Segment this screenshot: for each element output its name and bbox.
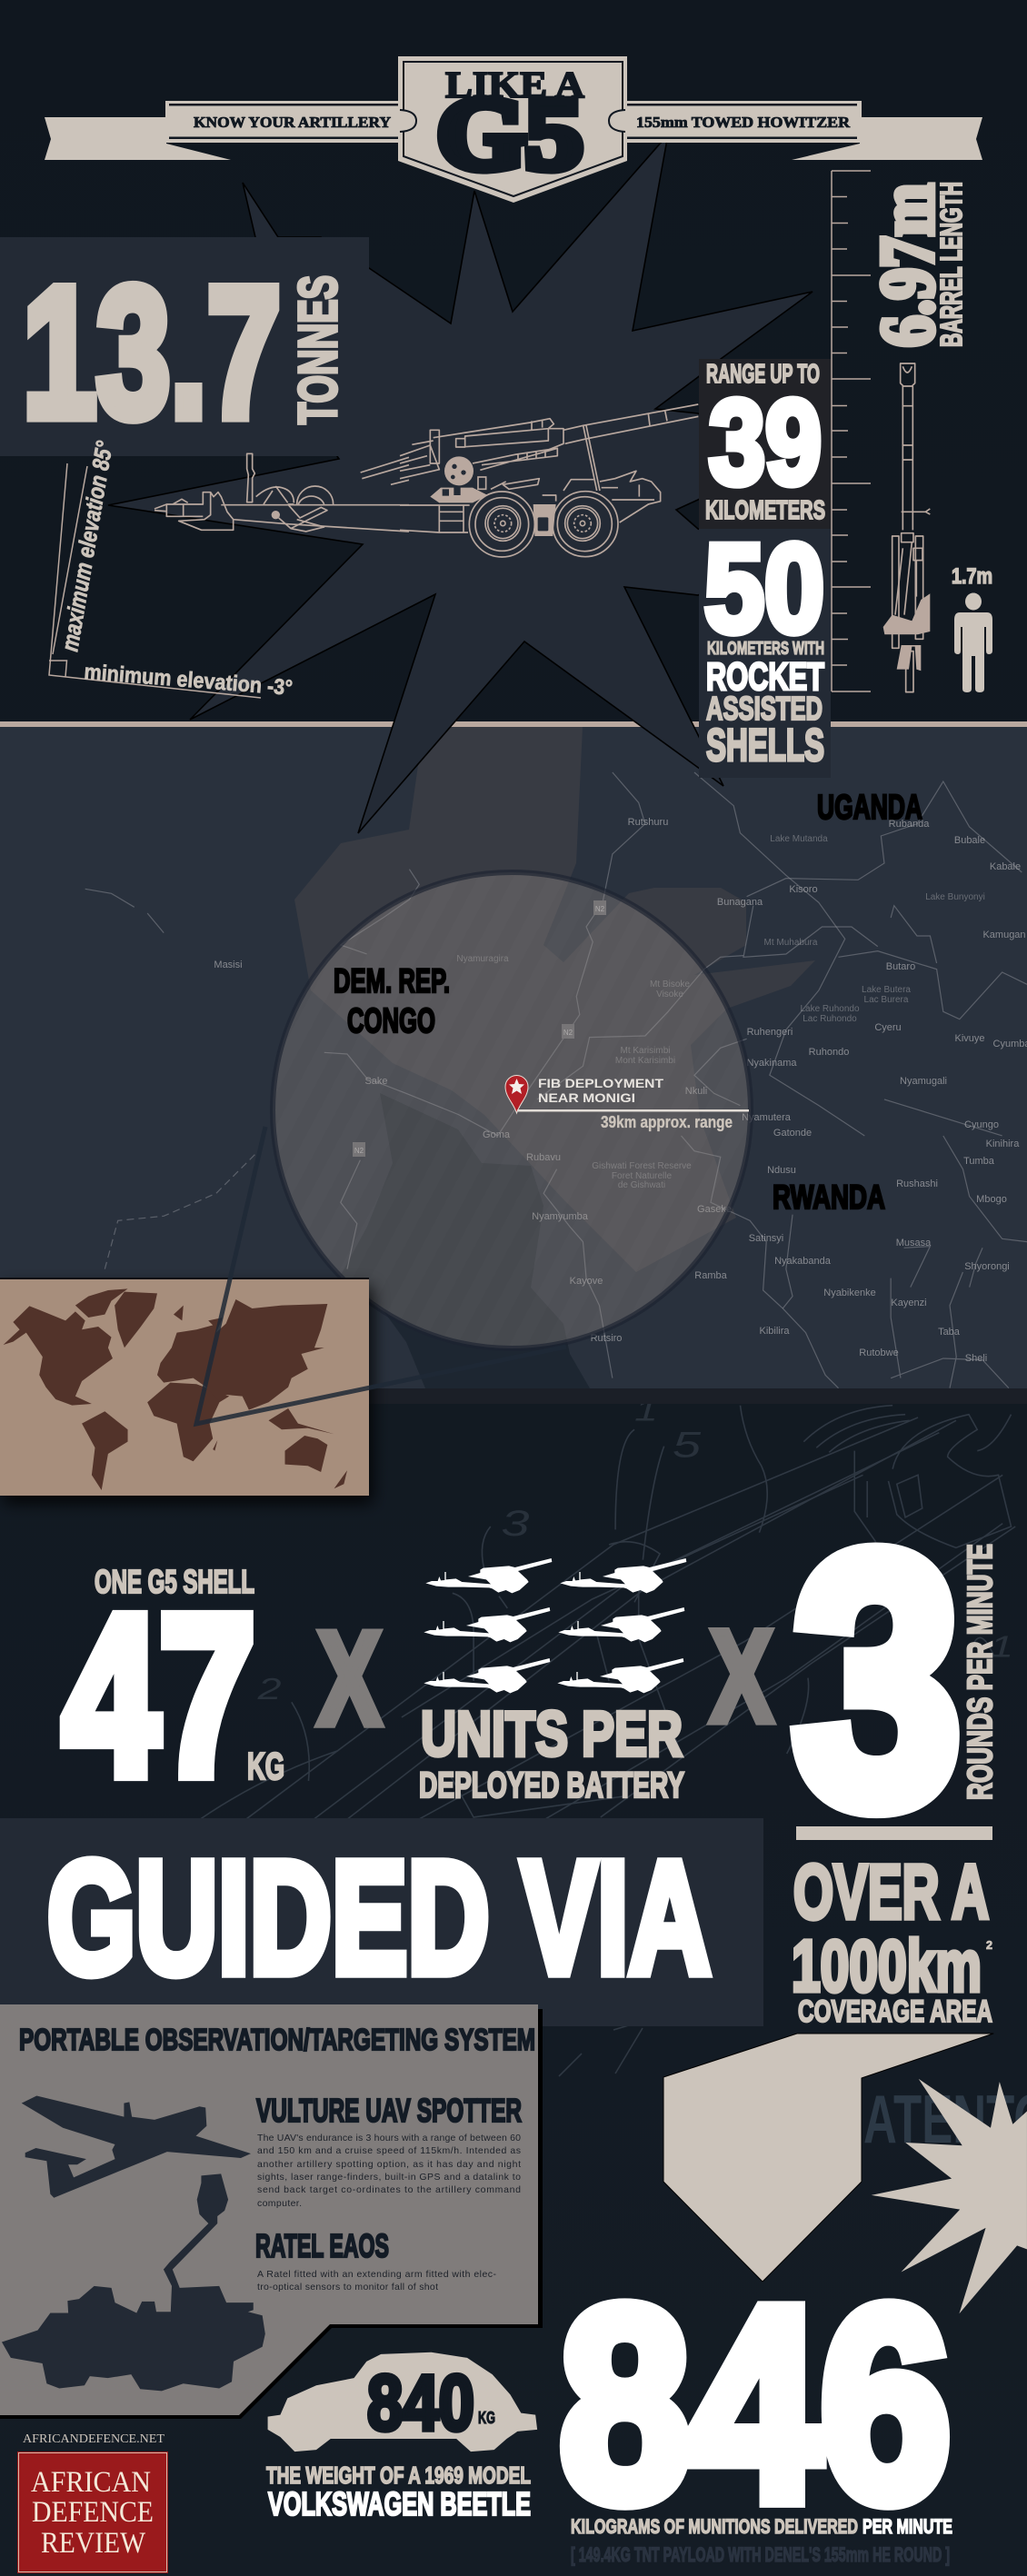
text: Vulture UAV: and 150 km and a cruise speed of 115km/h. Intended as <box>257 2145 521 2156</box>
gun: rear trail <box>155 453 409 532</box>
patent drawing background: 1 <box>634 1393 658 1427</box>
map: place names: Kisoro <box>789 884 818 895</box>
map: place names: Mbogo <box>976 1194 1007 1205</box>
map: place names: Bubale <box>954 835 985 846</box>
text: Ratel EAOS: RATEL EAOS <box>255 2227 389 2264</box>
panel: guided via: GUIDED VIA <box>47 1829 711 2007</box>
callout: FIB deployment: NEAR MONIGI <box>538 1090 635 1105</box>
map: roads upper <box>85 772 1027 1136</box>
country labels <box>334 789 922 1216</box>
map: place names: Mt Bisoke <box>650 980 690 990</box>
panel: deployment map <box>0 727 1027 1388</box>
panel: range: ASSISTED <box>706 690 823 727</box>
elevation diagram: maximum elevation 85° <box>55 439 118 653</box>
map: place names: Kinihira <box>986 1139 1020 1149</box>
source logo: DEFENCE <box>32 2496 154 2529</box>
band under map <box>0 1388 1027 1404</box>
elevation diagram <box>49 439 294 701</box>
map: place names: Butaro <box>886 961 915 972</box>
map: place names: Mont Karisimbi <box>615 1056 675 1066</box>
text: Vulture UAV <box>256 2092 522 2209</box>
map: place names: Kabale <box>990 861 1021 872</box>
map: place names: Rushashi <box>896 1179 938 1189</box>
map: place names: Rubanda <box>889 819 930 830</box>
map: place names: Kibilira <box>759 1326 790 1337</box>
map: place names: Masisi <box>214 960 243 970</box>
icon: map pin <box>505 1076 528 1113</box>
stat: shell weight: KG <box>247 1745 284 1787</box>
shell burst <box>872 2079 1027 2313</box>
panel: guided via <box>0 1818 763 2026</box>
callout: FIB deployment <box>505 1076 749 1131</box>
map: place names: Foret Naturelle <box>612 1171 673 1181</box>
map: volcano park area <box>294 727 815 1272</box>
map: place names: Nyakabanda <box>774 1256 832 1267</box>
G5 howitzer line drawing <box>155 404 698 557</box>
person scale figure <box>952 564 992 692</box>
panel: range <box>699 359 831 778</box>
map: place names: Shyorongi <box>964 1261 1010 1272</box>
map: place names: Lac Burera <box>864 995 909 1005</box>
starburst behind gun <box>108 134 813 833</box>
map: place names: Tumba <box>963 1156 995 1167</box>
stat: VW beetle: 840 <box>367 2360 474 2447</box>
panel: range: SHELLS <box>706 720 824 771</box>
map: roads lower <box>105 1136 1027 1388</box>
ribbon text left: KNOW YOUR ARTILLERY <box>194 114 391 131</box>
map: place names <box>214 817 1027 1364</box>
panel: weight: TONNES <box>288 275 348 424</box>
map: place names: Visoke <box>656 990 683 1000</box>
map: place names: Lake Butera <box>862 985 911 995</box>
stat: VW beetle <box>266 2352 537 2522</box>
stat: shell weight: ONE G5 SHELL <box>95 1563 254 1600</box>
stat: VW beetle: VOLKSWAGEN BEETLE <box>268 2485 531 2522</box>
stat: rounds per minute: ROUNDS PER MINUTE <box>962 1544 1000 1800</box>
map: place names: Ruhengeri <box>747 1027 793 1038</box>
callout: FIB deployment: 39km approx. range <box>601 1113 733 1131</box>
stat: VW beetle: THE WEIGHT OF A 1969 MODEL <box>266 2462 531 2489</box>
text: Vulture UAV: computer. <box>257 2198 302 2209</box>
source logo <box>17 2432 168 2573</box>
panel: range: 50 <box>704 519 824 659</box>
map: place names: Sheli <box>965 1353 987 1364</box>
map: place names: de Gishwati <box>618 1180 665 1190</box>
label: Rwanda: RWANDA <box>773 1179 885 1216</box>
stat: units per battery: DEPLOYED BATTERY <box>419 1765 684 1805</box>
stat: coverage area: 2 <box>986 1938 992 1952</box>
stat: VW beetle: KG <box>478 2409 495 2427</box>
map: place names: Nyamyumba <box>532 1211 589 1222</box>
ribbon centre <box>165 101 862 143</box>
map: N2 road shields: N2 <box>563 1029 573 1037</box>
map: place names: Musasa <box>896 1238 932 1248</box>
title shield <box>398 56 627 203</box>
inset: world map <box>0 1278 369 1496</box>
map: place names: Lake Bunyonyi <box>925 892 985 902</box>
map: place names: Ruhondo <box>809 1047 849 1058</box>
map: place names: Rutobwe <box>859 1348 899 1358</box>
map: place names: Kivuye <box>954 1033 985 1044</box>
stat: rounds per minute: 3 <box>793 1481 961 1879</box>
multiply sign 2: X <box>711 1605 773 1749</box>
stat: coverage area <box>792 1826 992 2029</box>
barrel length text: 6.97m <box>865 184 950 347</box>
map: place names: Nkuli <box>685 1086 707 1097</box>
map: place names: Lake Ruhondo <box>800 1004 860 1014</box>
ribbon text right: 155mm TOWED HOWITZER <box>636 114 851 131</box>
shell shape <box>663 2034 993 2282</box>
map: place names: Nyamugali <box>900 1076 947 1087</box>
map: place names: Nyamuragira <box>456 954 509 964</box>
ribbon tails <box>45 117 231 160</box>
label: DRC <box>334 962 450 1040</box>
icon group: six guns <box>424 1558 686 1693</box>
gun: carriage and barrel <box>400 404 698 557</box>
panel: range: 39 <box>709 375 822 509</box>
map: place names: Taba <box>938 1327 961 1338</box>
map: place names: Ramba <box>694 1270 728 1281</box>
zoom lines from inset to circle <box>196 1127 566 1424</box>
map: place names: Gishwati Forest Reserve <box>592 1161 692 1171</box>
map: place names: Rubavu <box>526 1152 561 1163</box>
header banner <box>45 56 982 203</box>
elevation diagram: minimum elevation -3° <box>84 660 294 701</box>
stat: units per battery: UNITS PER <box>421 1698 683 1769</box>
stat: munitions per minute: KILOGRAMS OF MUNITIONS DELIVERED <box>571 2515 858 2538</box>
map: N2 road shields <box>353 900 606 1157</box>
stat: units per battery <box>419 1698 684 1805</box>
map: place names: Gatonde <box>773 1128 812 1139</box>
barrel length text: BARREL LENGTH <box>934 182 968 347</box>
map: place names: Sake <box>364 1076 388 1087</box>
panel: weight: 13.7 <box>23 249 281 456</box>
text: Ratel EAOS <box>255 2227 496 2293</box>
map: N2 road shields: N2 <box>354 1147 364 1155</box>
panel: range: KILOMETERS WITH <box>707 639 824 659</box>
map: place names: Bunagana <box>717 897 763 908</box>
map: place names: Rutsiro <box>591 1333 622 1344</box>
map: place names: Lac Ruhondo <box>803 1014 857 1024</box>
panel: range: ROCKET <box>706 655 824 699</box>
text: Ratel EAOS: tro-optical sensors to monitor fall of shot <box>257 2282 438 2293</box>
source logo: AFRICANDEFENCE.NET <box>23 2432 165 2446</box>
map: N2 road shields: N2 <box>595 905 605 913</box>
stat: munitions per minute: PER MINUTE <box>862 2515 952 2538</box>
panel: range: KILOMETERS <box>705 496 825 525</box>
multiply sign 1: X <box>318 1605 381 1752</box>
map: place names: Cyungo <box>964 1119 999 1130</box>
source logo: AFRICAN <box>31 2466 151 2499</box>
label: DRC: CONGO <box>347 1002 435 1040</box>
icon: beetle silhouette <box>268 2352 537 2452</box>
person scale figure: 1.7m <box>952 564 992 589</box>
panel: range: RANGE UP TO <box>706 360 820 389</box>
label: DRC: DEM. REP. <box>334 962 450 1000</box>
text: Ratel EAOS: A Ratel fitted with an extending arm fitted with elec- <box>257 2269 496 2280</box>
map: Lake Kivu <box>341 1093 590 1388</box>
map: place names: Nyabikenke <box>823 1288 876 1298</box>
map: place names: Nyakinama <box>746 1058 797 1069</box>
source logo: REVIEW <box>41 2527 146 2560</box>
gun rear view <box>883 363 930 692</box>
panel heading: PORTABLE OBSERVATION/TARGETING SYSTEM <box>19 2023 535 2056</box>
icon: UAV silhouette <box>22 2096 251 2198</box>
patent drawing background: 3 <box>501 1504 529 1544</box>
map: place names: Goma <box>483 1129 511 1140</box>
stat: shell weight: 47 <box>63 1568 255 1822</box>
patent drawing background: 1 <box>990 1629 1013 1664</box>
icon: Ratel silhouette <box>2 2173 265 2391</box>
map: place names: Cyeru <box>874 1022 902 1033</box>
beige divider <box>0 721 1027 727</box>
map: place names: Lake Mutanda <box>770 834 828 844</box>
map: place names: Gaseke <box>697 1204 732 1215</box>
map: place names: Kayenzi <box>891 1298 927 1308</box>
barrel length scale <box>832 171 871 691</box>
map: place names: Rutshuru <box>628 817 668 828</box>
text: Vulture UAV: The UAV's endurance is 3 hours with a range of between 60 <box>257 2133 521 2143</box>
map: place names: Mt Muhabura <box>764 938 818 948</box>
title text: LIKE A <box>445 64 584 105</box>
icon: person <box>954 592 992 692</box>
callout: FIB deployment: FIB DEPLOYMENT <box>538 1076 663 1090</box>
patent drawing background <box>190 1393 1015 1826</box>
text: Vulture UAV: sights, laser range-finders, built-in GPS and a datalink to <box>257 2172 521 2183</box>
header banner: G5 <box>437 78 583 191</box>
label: Uganda: UGANDA <box>817 789 922 827</box>
range circle <box>273 872 751 1348</box>
map: place names: Nyamutera <box>742 1112 792 1123</box>
text: Vulture UAV: VULTURE UAV SPOTTER <box>256 2092 522 2129</box>
stat: munitions per minute: 846 <box>560 2251 951 2557</box>
panel: observation/targeting <box>0 2004 543 2419</box>
map: place names: Mt Karisimbi <box>620 1046 671 1056</box>
world map continents <box>4 1288 347 1490</box>
map: place names: Satinsyi <box>749 1233 783 1244</box>
text: Vulture UAV: another artillery spotting option, as it has day and night <box>257 2159 521 2170</box>
patent drawing background: 5 <box>673 1425 702 1465</box>
map: place names: Kamugan <box>982 930 1026 940</box>
map: place names: Ndusu <box>767 1165 796 1176</box>
text: Vulture UAV: send back target co-ordinates to the artillery command <box>257 2184 521 2195</box>
map: place names: Kayove <box>570 1276 603 1287</box>
patent drawing background: 2 <box>256 1672 281 1706</box>
